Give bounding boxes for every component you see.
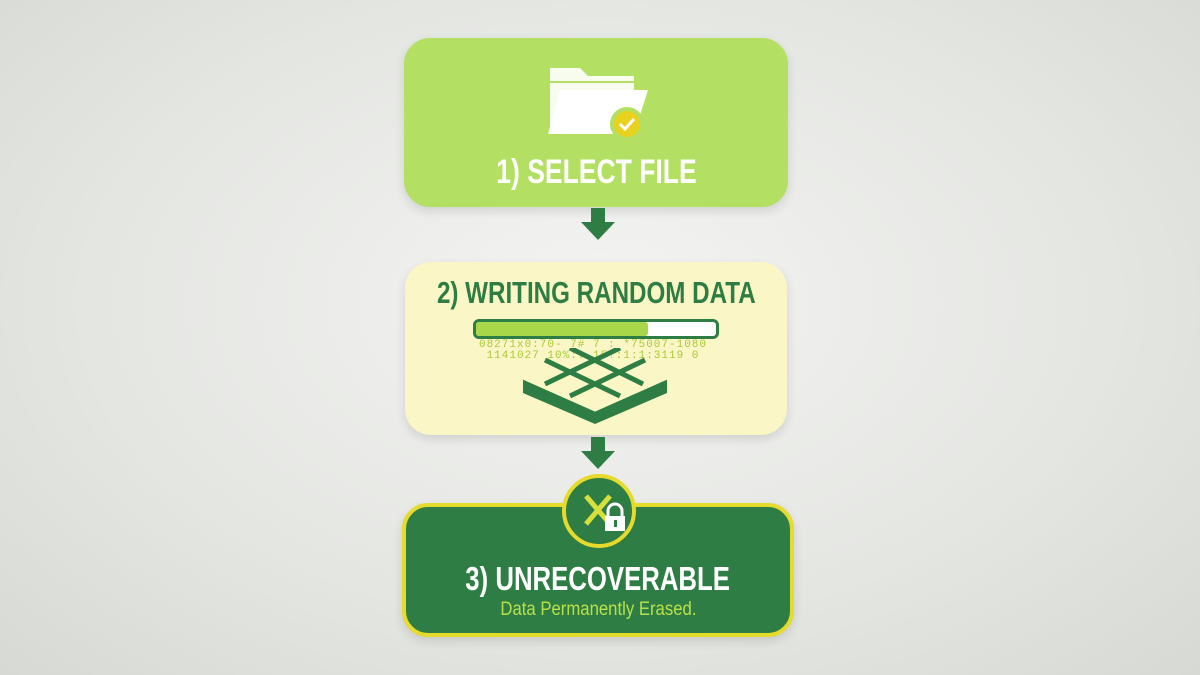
icon: folder with check xyxy=(548,68,648,137)
heading: 2) WRITING RANDOM DATA: 2) WRITING RANDOM DATA xyxy=(437,275,755,310)
random digits: 08271x0:70- 7# 7 : *75007-1080 xyxy=(479,339,707,351)
icon: grid blocks xyxy=(523,348,667,424)
subtitle: Data Permanently Erased. xyxy=(500,599,696,620)
random digits xyxy=(479,339,707,362)
random digits: 1141027 10%:: 15!:1:1:3119 0 xyxy=(487,350,699,362)
progress bar xyxy=(473,319,719,339)
heading: 3) UNRECOVERABLE: 3) UNRECOVERABLE xyxy=(466,560,730,597)
panel: writing random data xyxy=(405,262,787,435)
arrow 1 xyxy=(581,208,615,240)
panel: select file xyxy=(404,38,788,207)
panel: unrecoverable xyxy=(402,503,794,637)
arrow 2 xyxy=(581,437,615,469)
heading: 1) SELECT FILE: 1) SELECT FILE xyxy=(496,153,696,191)
icon: x with lock xyxy=(562,474,636,548)
